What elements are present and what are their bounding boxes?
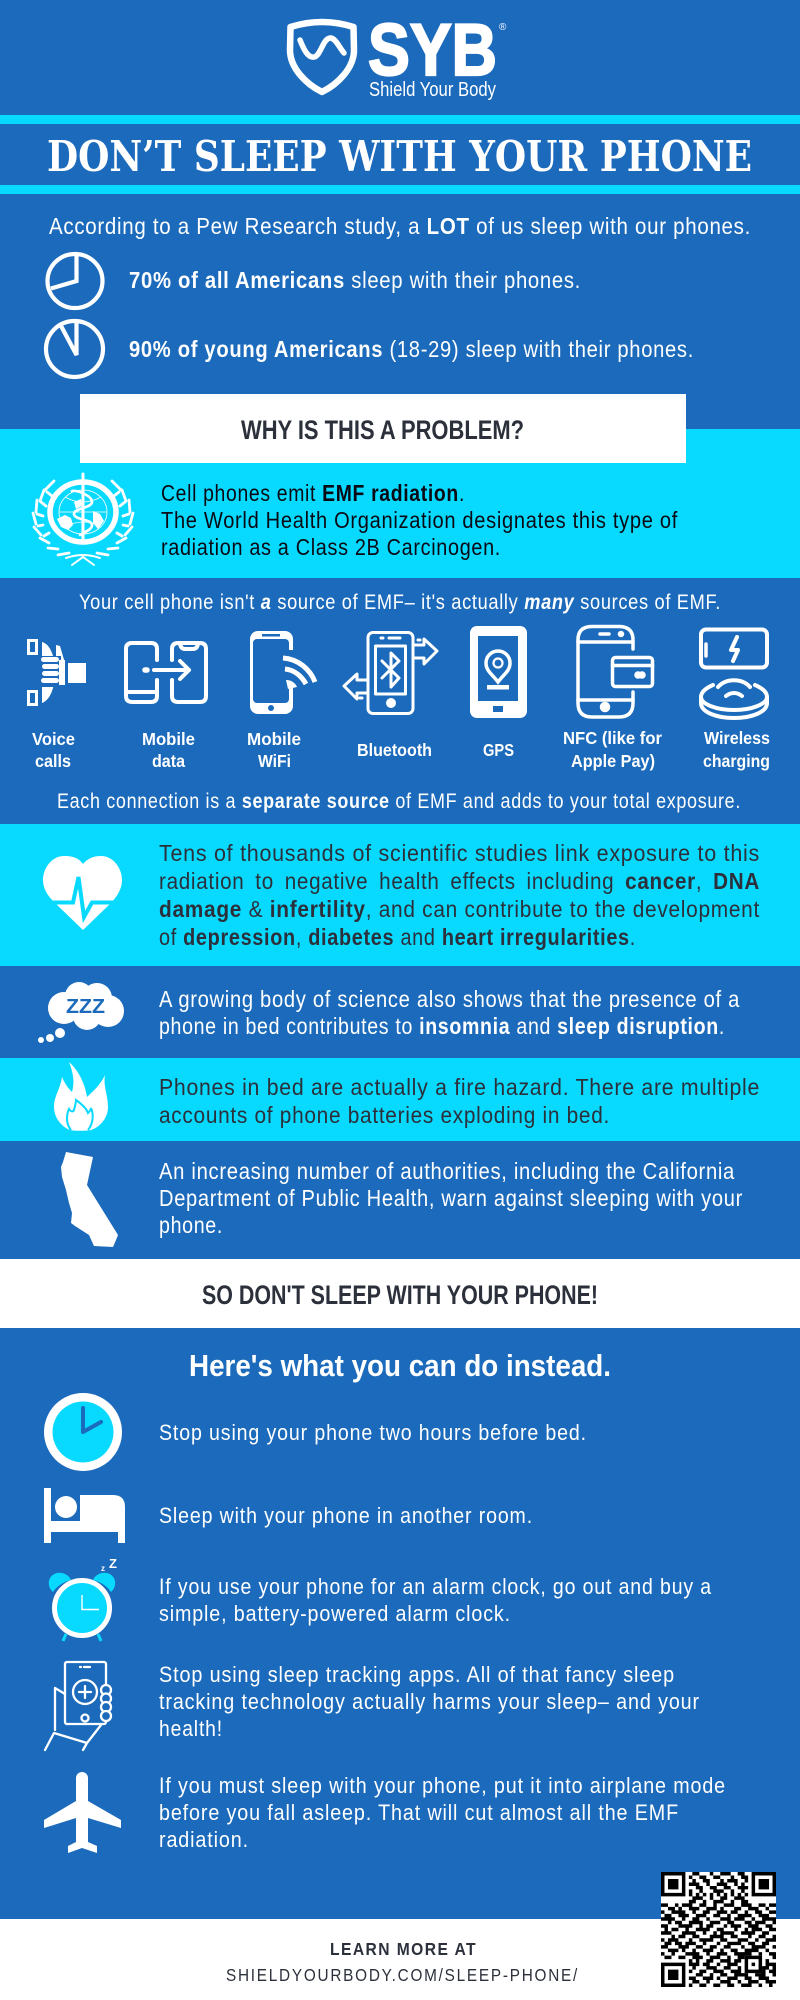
stat text: 70% of all Americans sleep with their phones. — [129, 267, 581, 293]
heading: so don't sleep with your phone: SO DON'T SLEEP WITH YOUR PHONE! — [202, 1280, 598, 1310]
stat: 90 percent — [46, 321, 694, 377]
WHO text: Cell phones emit EMF radiation. — [161, 480, 465, 506]
sleep text — [159, 986, 740, 1039]
intro text: According to a Pew Research study, a LOT of us sleep with our phones. — [49, 213, 751, 239]
panel: health effects — [0, 824, 800, 966]
QR code — [661, 1872, 776, 1987]
stat text: 90% of young Americans (18-29) sleep with their phones. — [129, 336, 694, 362]
tip text: radiation. — [159, 1827, 249, 1852]
tip: phone in another room — [44, 1488, 533, 1543]
label: Wireless — [704, 728, 770, 748]
icon: battery on charger — [701, 630, 767, 718]
label: Bluetooth — [357, 740, 432, 760]
label: Mobile — [247, 729, 301, 749]
sources intro: Your cell phone isn't a source of EMF– it's actually many sources of EMF. — [79, 590, 721, 614]
label — [703, 728, 770, 771]
icon: flame — [54, 1062, 108, 1131]
label: Voice — [32, 729, 75, 749]
heading: so don't sleep with your phone — [0, 1259, 800, 1328]
fire text — [159, 1074, 760, 1128]
WHO text — [161, 480, 678, 560]
tip: stop sleep tracking apps — [45, 1662, 700, 1750]
tip text: Sleep with your phone in another room. — [159, 1503, 533, 1528]
icon: phones with transfer arrow — [126, 643, 206, 702]
fire text: accounts of phone batteries exploding in bed. — [159, 1102, 610, 1128]
icon: alarm clock — [49, 1556, 117, 1641]
tip text: Stop using your phone two hours before bed. — [159, 1420, 587, 1445]
tip: stop two hours before bed — [44, 1393, 587, 1471]
icon: California map — [61, 1152, 118, 1247]
WHO text: radiation as a Class 2B Carcinogen. — [161, 534, 501, 560]
tip text — [159, 1574, 712, 1626]
tip text: health! — [159, 1716, 223, 1741]
tip text — [159, 1773, 726, 1852]
tagline: Shield Your Body — [369, 79, 496, 101]
tip text: If you use your phone for an alarm clock, go out and buy a — [159, 1574, 712, 1599]
panel: sleep disruption — [0, 966, 800, 1058]
heading: why is this a problem — [80, 394, 686, 463]
tip text: before you fall asleep. That will cut almost all the EMF — [159, 1800, 679, 1825]
icon: alarm clock: Z — [109, 1556, 117, 1571]
heading: what you can do instead: Here's what you can do instead. — [189, 1348, 611, 1383]
title band — [0, 115, 800, 194]
health text — [159, 840, 760, 950]
label — [563, 728, 662, 771]
California text — [159, 1158, 743, 1238]
tip text — [159, 1662, 700, 1741]
label — [247, 729, 301, 771]
health text: damage & infertility, and can contribute to the development — [159, 896, 760, 922]
icon: hand holding phone with health app — [45, 1662, 111, 1750]
icon: clock — [44, 1393, 122, 1471]
icon: zzz thought bubble: ZZZ — [66, 996, 105, 1018]
tip: airplane mode — [44, 1772, 726, 1853]
panel: sources of EMF — [27, 590, 770, 813]
source: mobile wifi — [247, 631, 315, 771]
icon: WHO emblem — [33, 474, 133, 565]
brand name: SYB — [368, 10, 497, 91]
label: Apple Pay) — [571, 751, 655, 771]
icon: phone with payment card — [578, 626, 652, 717]
source: NFC — [563, 626, 662, 771]
icon: airplane — [44, 1772, 121, 1853]
learn more: LEARN MORE AT — [330, 1939, 477, 1959]
label — [32, 729, 75, 771]
health text: Tens of thousands of scientific studies link exposure to this — [159, 840, 760, 866]
icon: phone with map pin — [470, 626, 527, 718]
label: Mobile — [142, 729, 195, 749]
label — [142, 729, 195, 771]
label: data — [152, 751, 185, 771]
tip text: simple, battery-powered alarm clock. — [159, 1601, 511, 1626]
icon: bed — [44, 1488, 125, 1543]
tip text: Stop using sleep tracking apps. All of that fancy sleep — [159, 1662, 675, 1687]
icon: phone with wifi waves — [250, 631, 315, 714]
panel: fire hazard — [0, 1058, 800, 1141]
icon: pie 70 percent — [48, 254, 102, 308]
logo: Shield Your Body — [290, 10, 507, 101]
source: voice calls — [27, 639, 86, 771]
California text: phone. — [159, 1212, 223, 1238]
icon: heart with pulse — [40, 856, 125, 930]
stat: 70 percent — [48, 254, 581, 308]
tip: battery alarm clock — [49, 1556, 712, 1641]
WHO text: The World Health Organization designates this type of — [161, 507, 678, 533]
icon: zzz thought bubble — [38, 982, 124, 1043]
panel: WHO carcinogen — [0, 429, 800, 578]
icon: pie 90 percent — [46, 321, 103, 377]
footer — [0, 1872, 800, 2000]
label: WiFi — [258, 751, 291, 771]
tip text: If you must sleep with your phone, put it into airplane mode — [159, 1773, 726, 1798]
health text: radiation to negative health effects including cancer, DNA — [159, 868, 760, 894]
url: SHIELDYOURBODY.COM/SLEEP-PHONE/ — [226, 1965, 579, 1985]
icon: shield — [290, 22, 354, 92]
icon: alarm clock: z — [101, 1564, 105, 1573]
label: NFC (like for — [563, 728, 662, 748]
sleep text: phone in bed contributes to insomnia and sleep disruption. — [159, 1013, 725, 1039]
icon: hand holding phone — [27, 639, 86, 706]
label: charging — [703, 751, 770, 771]
tip text: tracking technology actually harms your sleep– and your — [159, 1689, 700, 1714]
label: calls — [35, 751, 71, 771]
connection note: Each connection is a separate source of EMF and adds to your total exposure. — [57, 789, 741, 813]
source: mobile data — [126, 643, 206, 771]
heading: why is this a problem: WHY IS THIS A PROBLEM? — [241, 415, 524, 445]
health text: of depression, diabetes and heart irregularities. — [159, 924, 636, 950]
panel: California warning — [0, 1141, 800, 1259]
source: wireless charging — [701, 630, 770, 771]
label: GPS — [483, 740, 514, 760]
source: bluetooth — [344, 632, 437, 760]
source: GPS — [470, 626, 527, 760]
registered mark: ® — [499, 22, 507, 33]
icon: phone with bluetooth arrows — [344, 632, 437, 714]
